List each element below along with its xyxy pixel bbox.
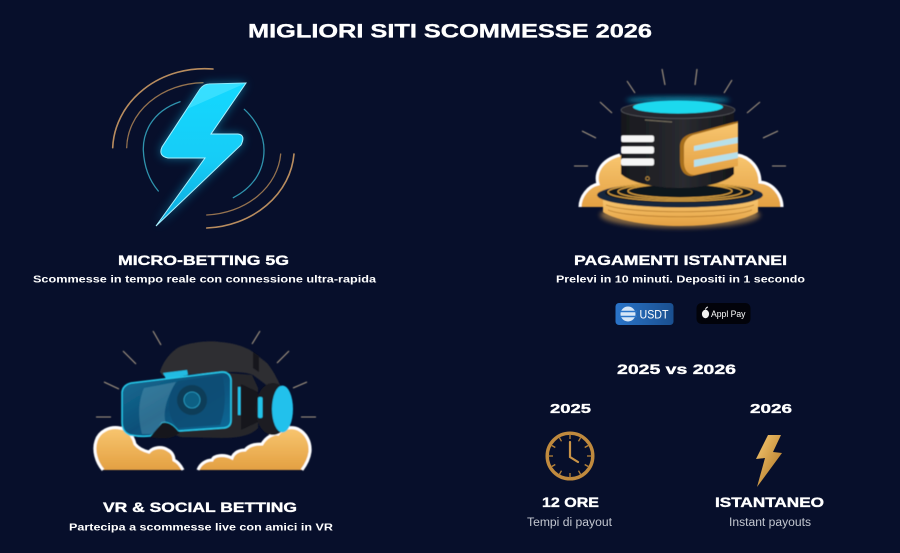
badge: USDT (616, 303, 674, 325)
heading: VR and social betting: VR & SOCIAL BETTING (103, 500, 297, 515)
heading: comparison: 2025 vs 2026 (617, 362, 737, 377)
heading: pagamenti istantanei: PAGAMENTI ISTANTANEI (574, 253, 787, 268)
title: MIGLIORI SITI SCOMMESSE 2026 (248, 22, 652, 42)
column: 2026 (715, 401, 824, 529)
icon: payment device (574, 69, 786, 228)
badge: Apple Pay: Appl Pay (711, 309, 746, 319)
icon: gold lightning (756, 435, 782, 487)
text: VR description: Partecipa a scommesse live con amici in VR (69, 522, 334, 534)
heading: micro-betting: MICRO-BETTING 5G (118, 253, 289, 268)
text: micro-betting description: Scommesse in tempo reale con connessione ultra-rapida (33, 274, 377, 286)
value: 12 ore: 12 ORE (542, 495, 599, 510)
year label 2026: 2026 (750, 401, 792, 416)
icon: VR headset (95, 331, 316, 470)
year label 2025: 2025 (550, 401, 591, 416)
text: pagamenti description: Prelevi in 10 minuti. Depositi in 1 secondo (556, 274, 805, 286)
badge: Apple Pay (696, 303, 750, 324)
icon: clock (547, 433, 593, 479)
column: 2025 (527, 401, 613, 529)
caption: tempi di payout: Tempi di payout (527, 517, 613, 529)
caption: instant payouts: Instant payouts (729, 517, 811, 529)
badge: USDT: USDT (640, 310, 668, 322)
value: istantaneo: ISTANTANEO (715, 495, 824, 510)
icon: lightning bolt with arcs (113, 69, 294, 228)
